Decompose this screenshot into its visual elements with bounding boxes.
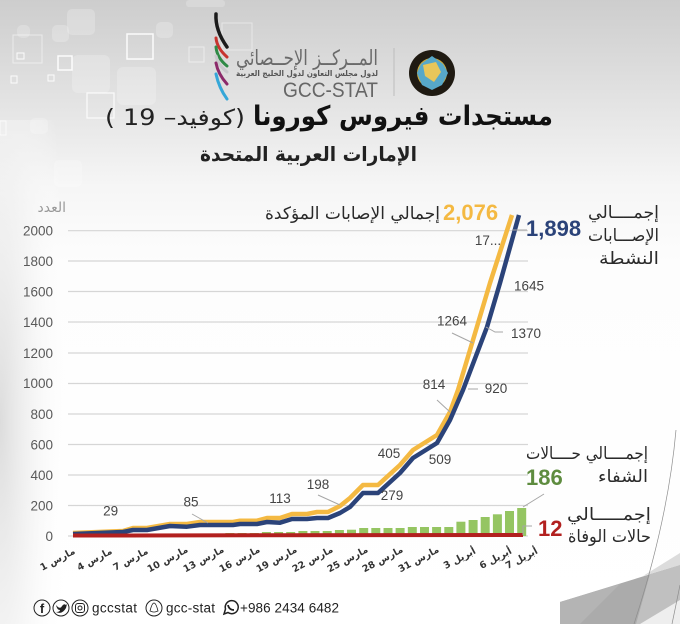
confirmed cases line [73,215,512,533]
subtitle: الإمارات العربية المتحدة [200,142,417,166]
y axis labels: 200 [30,498,53,514]
callout: total active: الإصـــابات [588,226,659,246]
y axis labels: 1000 [23,376,53,391]
x axis labels: 25 مارس [326,544,370,575]
y axis labels: 2000 [23,224,53,238]
data labels: 1370 [511,326,541,341]
logo: centre name [236,46,378,102]
data labels [103,233,544,518]
recovered bars [213,508,526,536]
y axis labels: 1400 [23,315,53,330]
handle: gccstat: gccstat [92,600,137,616]
logo: centre name: GCC-STAT [283,79,378,102]
logo: GCC emblem [409,50,455,96]
data labels: 279 [381,488,403,503]
title: مستجدات فيروس كورونا [253,101,553,132]
y axis labels: 800 [30,407,53,422]
y axis labels: 1600 [23,284,53,300]
callout: total active [526,203,659,269]
x axis labels: 3 أبريل [441,544,478,572]
decorative squares [0,0,252,187]
phone number: +986 2434 6482 [240,600,339,616]
x axis labels: 13 مارس [182,544,226,575]
data labels: 198 [307,477,329,492]
y axis title: العدد [38,200,66,216]
icon: snapchat [146,600,162,616]
data labels: 920 [485,381,507,396]
leader lines [192,230,544,535]
y axis labels [23,224,53,544]
callout: total active: النشطة [599,249,659,269]
callout: total confirmed: إجمالي الإصابات المؤكدة [265,204,440,224]
icon: facebook: f [40,601,45,616]
callout: total deaths: حالات الوفاة [568,527,651,547]
handle: gcc-stat: gcc-stat [166,600,215,616]
callout: total active: 1,898 [526,216,581,241]
callout: total deaths: إجمـــــالي [567,505,651,525]
x axis labels: 7 أبريل [503,544,540,572]
callout: total recovered: الشفاء [598,467,648,487]
y axis labels: 400 [30,468,53,483]
icon: instagram [72,600,88,616]
callout: total deaths [538,505,651,547]
x axis labels: 28 مارس [361,544,405,575]
footer: social media [34,600,339,616]
data labels: 113 [269,491,291,506]
callout: total recovered [526,444,648,490]
data labels: 509 [429,452,451,467]
callout: total recovered: 186 [526,465,563,490]
data labels: 1264 [437,314,468,328]
data labels: 17... [475,233,501,248]
data labels: 405 [378,446,400,461]
data labels: 29 [103,504,118,518]
y axis labels: 600 [30,438,53,452]
x axis labels: 31 مارس [397,544,441,575]
callout: total active: إجمــــالي [588,203,659,223]
y axis labels: 1200 [23,346,53,361]
x axis labels: 6 أبريل [477,544,514,572]
title: (كوفيد– 19 ) [105,106,245,131]
callout: total deaths: 12 [538,516,562,541]
data labels: 1645 [514,278,544,294]
y axis labels: 1800 [23,254,53,269]
logo: GCC-STAT ribbon [216,14,227,99]
y axis labels: 0 [45,529,53,544]
data labels: 814 [423,377,446,392]
x axis labels: 4 مارس [75,546,114,574]
x axis labels: 16 مارس [218,544,262,575]
icon: twitter [53,600,69,616]
gridlines [68,231,528,536]
x axis labels: 10 مارس [146,544,190,575]
x axis labels [38,544,540,575]
deaths line [73,533,523,538]
callout: total confirmed: 2,076 [443,200,498,225]
logo divider [393,48,395,96]
title [105,101,553,132]
callout: total recovered: إجمــــالي حــــالات [526,444,648,464]
x axis labels: 22 مارس [291,544,335,575]
icon: whatsapp [224,601,238,614]
callout: total confirmed [265,200,498,225]
data labels: 85 [183,494,199,510]
active cases line [73,215,519,534]
x axis labels: 1 مارس [38,546,77,574]
logo: centre name: المــركــز الإحــصائي [236,46,378,70]
logo: centre name: لدول مجلس التعاون لدول الخليج العربية [236,69,378,79]
x axis labels: 7 مارس [111,546,150,574]
icon: facebook [34,600,50,616]
x axis labels: 19 مارس [255,544,299,575]
